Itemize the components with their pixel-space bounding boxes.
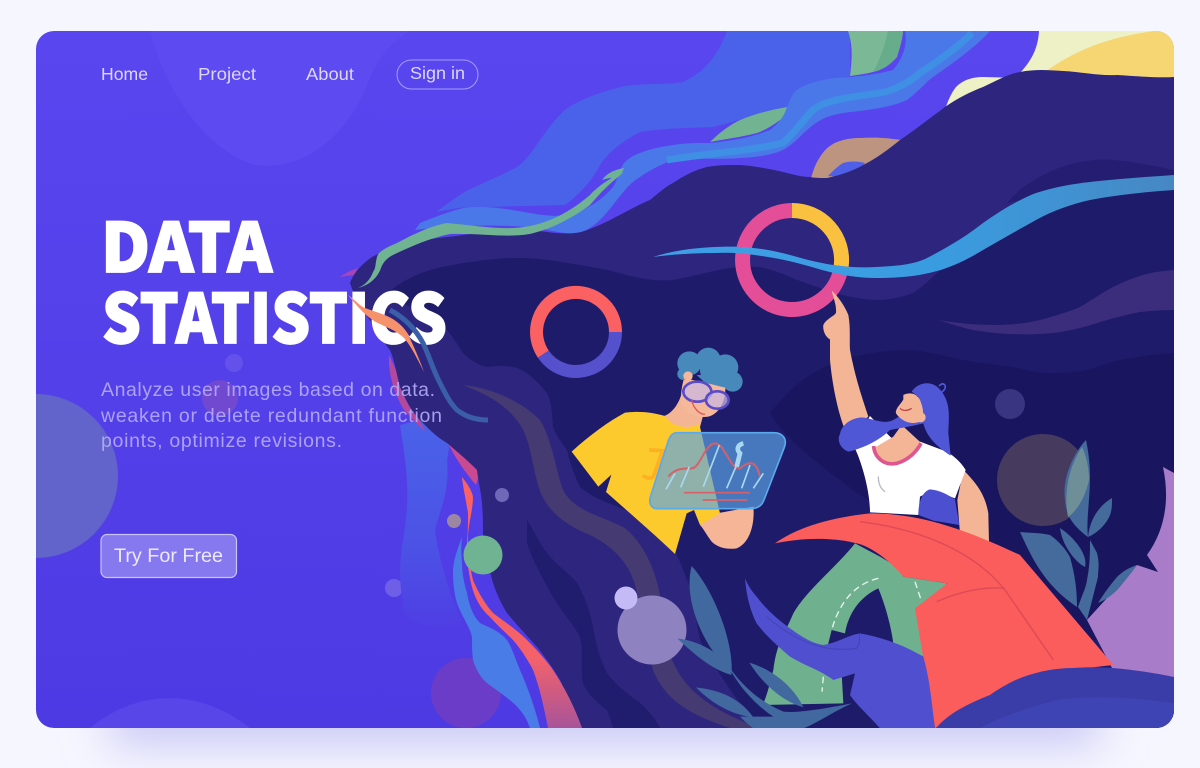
blue streak: [390, 310, 488, 420]
sign in pill: Sign in: [410, 63, 465, 83]
tablet chart: [666, 443, 763, 500]
wisp purple: [938, 270, 1174, 334]
title: [103, 220, 446, 345]
green pants: [763, 543, 947, 705]
man arm: [700, 507, 754, 549]
chart: red and blue ring: [537, 292, 616, 371]
dark hill main shape: [350, 70, 1174, 728]
man hair: [677, 348, 743, 392]
man pocket: [643, 450, 663, 478]
brown blob: [811, 138, 902, 180]
sign in pill: [397, 60, 478, 89]
bottom right blue hill: [936, 667, 1174, 728]
upper dark blob: [1007, 160, 1174, 203]
dark inner layer: [385, 182, 1174, 728]
navigation: [101, 60, 478, 89]
chart: pink and yellow ring: [743, 210, 842, 309]
bottom plant: [677, 566, 852, 728]
description text: points, optimize revisions.: [101, 430, 342, 452]
woman raised arm: [823, 291, 868, 433]
woman: [823, 291, 989, 543]
man glasses: [683, 382, 729, 409]
top right yellow shapes: [945, 31, 1174, 112]
description text: [100, 379, 442, 452]
title: STATISTICS: [102, 264, 447, 363]
button: try for free: [101, 534, 236, 578]
woman shirt: [855, 416, 966, 515]
blue leaf: [745, 578, 935, 728]
figures drawn in 3x coordinates: [572, 291, 1113, 728]
top green leaves: [602, 31, 903, 180]
circles: [447, 389, 1089, 664]
right plant: [1020, 440, 1137, 620]
tablet: [650, 433, 785, 509]
woman gap: [918, 489, 959, 525]
orange streak: [348, 295, 424, 372]
woman hair: [839, 383, 951, 456]
man: [572, 348, 785, 554]
button: try for free: Try For Free: [114, 546, 223, 567]
navigation: About: [306, 64, 354, 84]
red stripe: [462, 477, 582, 728]
darker blob behind woman: [770, 350, 1174, 640]
flowing blue waves top: [415, 31, 990, 233]
ribbon brown: [463, 385, 760, 728]
card shadow: [110, 690, 1100, 745]
woman right arm: [957, 470, 989, 543]
blue ribbon: [653, 175, 1174, 278]
woman collar: [874, 443, 921, 464]
woman chest: [873, 425, 922, 464]
man neck: [664, 394, 703, 427]
man shirt: [572, 412, 720, 554]
pink tips: [340, 268, 478, 485]
navigation: Home: [101, 64, 148, 84]
purple plant right: [1087, 467, 1174, 692]
woman face: [896, 393, 923, 423]
navigation: Project: [198, 64, 256, 84]
title: DATA: [101, 193, 273, 292]
description text: weaken or delete redundant function: [100, 405, 442, 427]
man head: [681, 378, 725, 417]
red leaf: [775, 513, 1113, 728]
lower left dark strand: [527, 520, 660, 728]
lower left flowing ribbons: [400, 420, 540, 728]
background decorative blobs: [36, 354, 501, 728]
green tendril: [358, 172, 624, 288]
description text: Analyze user images based on data.: [101, 379, 435, 401]
